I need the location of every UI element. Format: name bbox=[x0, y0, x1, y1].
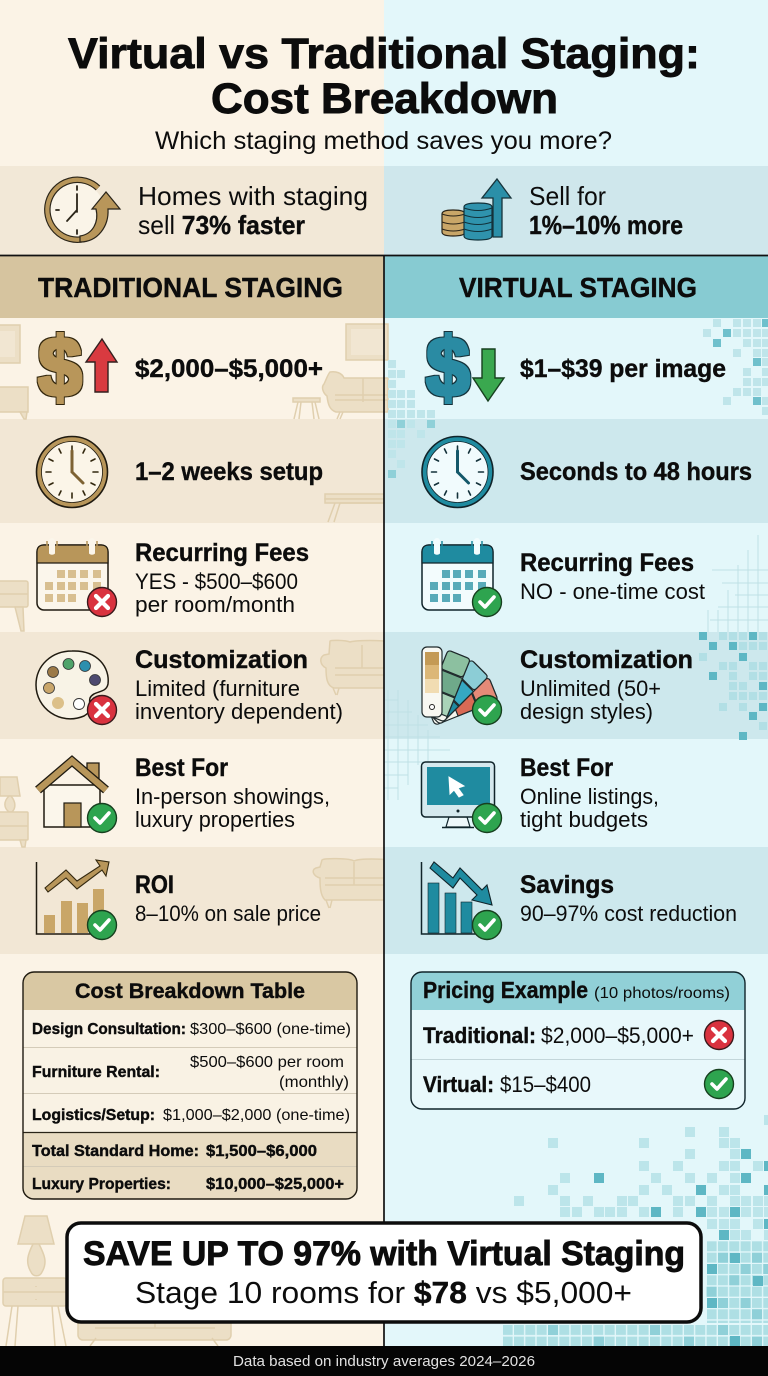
text: recurring fees traditional bbox=[135, 539, 309, 617]
row: customization bbox=[36, 646, 343, 724]
table row: furniture rental: Furniture Rental: bbox=[32, 1064, 160, 1081]
column heading: virtual: VIRTUAL STAGING bbox=[459, 272, 697, 303]
text: recurring fees traditional: YES - $500–$600 bbox=[135, 569, 298, 594]
icon: monitor with cursor and check bbox=[422, 762, 502, 832]
text: savings: 90–97% cost reduction bbox=[520, 901, 737, 926]
table row: luxury properties: Luxury Properties: bbox=[32, 1176, 171, 1193]
table row: furniture rental: (monthly) bbox=[279, 1074, 349, 1091]
table row: design consultation: $300–$600 (one-time) bbox=[190, 1021, 351, 1038]
text: recurring fees virtual bbox=[520, 549, 705, 604]
text: customization virtual: design styles) bbox=[520, 699, 653, 724]
text: customization traditional: Limited (furniture bbox=[135, 676, 300, 701]
panel: stats band bbox=[0, 166, 768, 255]
pricing row: virtual: Virtual: bbox=[423, 1072, 494, 1097]
subtitle: Which staging method saves you more? bbox=[155, 127, 612, 155]
icon: clock bbox=[422, 436, 493, 508]
text: higher price stat: 1%–10% more bbox=[529, 210, 683, 240]
text: recurring fees traditional: per room/month bbox=[135, 592, 295, 617]
icon: dollar sign with green down arrow: $ bbox=[426, 320, 470, 414]
text: best for virtual bbox=[520, 754, 659, 832]
row: cost: $1–$39 per image bbox=[520, 355, 726, 383]
text: faster sale stat bbox=[138, 181, 368, 240]
pricing heading: Pricing Example bbox=[423, 977, 588, 1003]
text: customization traditional bbox=[135, 646, 343, 724]
text: best for traditional: Best For bbox=[135, 754, 228, 782]
footer: data source bbox=[0, 1346, 768, 1376]
icon: colour swatch fan with check bbox=[422, 647, 502, 725]
icon: dollar sign with red up arrow bbox=[38, 320, 117, 414]
text: customization traditional: Customization bbox=[135, 646, 308, 674]
text: recurring fees virtual: Recurring Fees bbox=[520, 549, 694, 577]
text: savings bbox=[520, 871, 737, 926]
text: ROI: 8–10% on sale price bbox=[135, 901, 321, 926]
icon: dollar sign with red up arrow: $ bbox=[38, 320, 82, 414]
title bbox=[68, 30, 700, 123]
pricing row: virtual bbox=[423, 1070, 734, 1098]
callout: save up to 97% bbox=[67, 1223, 701, 1322]
table row: total standard home bbox=[32, 1143, 317, 1160]
text: best for virtual: tight budgets bbox=[520, 807, 648, 832]
callout: save up to 97%: SAVE UP TO 97% with Virtual Staging bbox=[83, 1235, 685, 1273]
panel: virtual staging bbox=[384, 256, 768, 1347]
icon: dollar sign with green down arrow bbox=[426, 320, 504, 414]
text: customization virtual bbox=[520, 646, 693, 724]
icon: clock with circular arrow bbox=[47, 180, 120, 242]
row: cost bbox=[426, 320, 726, 414]
table row: logistics: Logistics/Setup: bbox=[32, 1107, 155, 1124]
table row: luxury properties bbox=[32, 1176, 344, 1193]
row: best for bbox=[422, 754, 659, 832]
row: turnaround time bbox=[422, 436, 752, 508]
table row: furniture rental bbox=[32, 1054, 349, 1091]
text: best for traditional: In-person showings, bbox=[135, 784, 330, 809]
icon: paint palette with X bbox=[36, 651, 116, 724]
text: best for virtual: Online listings, bbox=[520, 784, 659, 809]
table row: logistics bbox=[32, 1107, 350, 1124]
table row: design consultation bbox=[32, 1021, 351, 1038]
icon: rising chart with check bbox=[36, 860, 116, 940]
text: higher price stat bbox=[529, 181, 683, 240]
row: savings bbox=[422, 862, 737, 940]
icon: calendar with X bbox=[37, 541, 116, 616]
table row: furniture rental: $500–$600 per room bbox=[190, 1054, 344, 1071]
text: customization virtual: Customization bbox=[520, 646, 693, 674]
text: savings: Savings bbox=[520, 871, 614, 899]
table row: total standard home: $1,500–$6,000 bbox=[206, 1143, 317, 1160]
row: recurring fees bbox=[37, 539, 309, 617]
row: cost bbox=[38, 320, 323, 414]
column heading: traditional bbox=[0, 256, 384, 318]
pricing row: traditional bbox=[423, 1020, 734, 1050]
pricing heading bbox=[423, 977, 730, 1003]
row: setup time bbox=[36, 436, 323, 508]
icon: clock bbox=[36, 436, 108, 508]
footer: data source: Data based on industry averages 2024–2026 bbox=[233, 1354, 535, 1370]
icon: coins with up arrow bbox=[442, 179, 511, 240]
icon: falling chart with check bbox=[422, 862, 502, 940]
text: best for virtual: Best For bbox=[520, 754, 613, 782]
icon: house with check bbox=[38, 761, 116, 832]
text: recurring fees traditional: Recurring Fees bbox=[135, 539, 309, 567]
text: ROI bbox=[135, 871, 321, 926]
callout: save up to 97%: Stage 10 rooms for $78 vs $5,000+ bbox=[135, 1275, 632, 1310]
pricing row: traditional: Traditional: bbox=[423, 1023, 536, 1048]
row: setup time: 1–2 weeks setup bbox=[135, 458, 323, 486]
row: cost: $2,000–$5,000+ bbox=[135, 355, 323, 383]
text: faster sale stat: Homes with staging bbox=[138, 181, 368, 211]
panel: traditional staging bbox=[0, 256, 388, 1346]
row: best for bbox=[38, 754, 330, 832]
column heading: virtual bbox=[384, 256, 768, 318]
pricing row: virtual: $15–$400 bbox=[500, 1072, 591, 1097]
table: cost breakdown bbox=[23, 972, 357, 1199]
table row: luxury properties: $10,000–$25,000+ bbox=[206, 1176, 344, 1193]
text: ROI: ROI bbox=[135, 871, 174, 899]
icon: calendar with check bbox=[422, 541, 502, 616]
table: pricing example bbox=[411, 972, 745, 1109]
text: best for traditional: luxury properties bbox=[135, 807, 295, 832]
row: turnaround time: Seconds to 48 hours bbox=[520, 458, 752, 486]
row: recurring fees bbox=[422, 541, 705, 616]
table row: logistics: $1,000–$2,000 (one-time) bbox=[163, 1107, 350, 1124]
row: customization bbox=[422, 646, 693, 725]
column heading: traditional: TRADITIONAL STAGING bbox=[38, 272, 343, 303]
row: ROI bbox=[36, 860, 321, 940]
title: Cost Breakdown bbox=[211, 75, 558, 123]
table row: total standard home: Total Standard Home: bbox=[32, 1143, 199, 1160]
text: customization traditional: inventory dependent) bbox=[135, 699, 343, 724]
pricing heading: (10 photos/rooms) bbox=[594, 985, 730, 1002]
text: recurring fees virtual: NO - one-time cost bbox=[520, 579, 705, 604]
text: faster sale stat: sell 73% faster bbox=[138, 210, 305, 240]
table heading: Cost Breakdown Table bbox=[75, 980, 305, 1003]
text: best for traditional bbox=[135, 754, 330, 832]
table row: design consultation: Design Consultation: bbox=[32, 1021, 186, 1038]
text: higher price stat: Sell for bbox=[529, 181, 606, 211]
title: Virtual vs Traditional Staging: bbox=[68, 30, 700, 78]
text: customization virtual: Unlimited (50+ bbox=[520, 676, 661, 701]
pricing row: traditional: $2,000–$5,000+ bbox=[541, 1023, 694, 1048]
